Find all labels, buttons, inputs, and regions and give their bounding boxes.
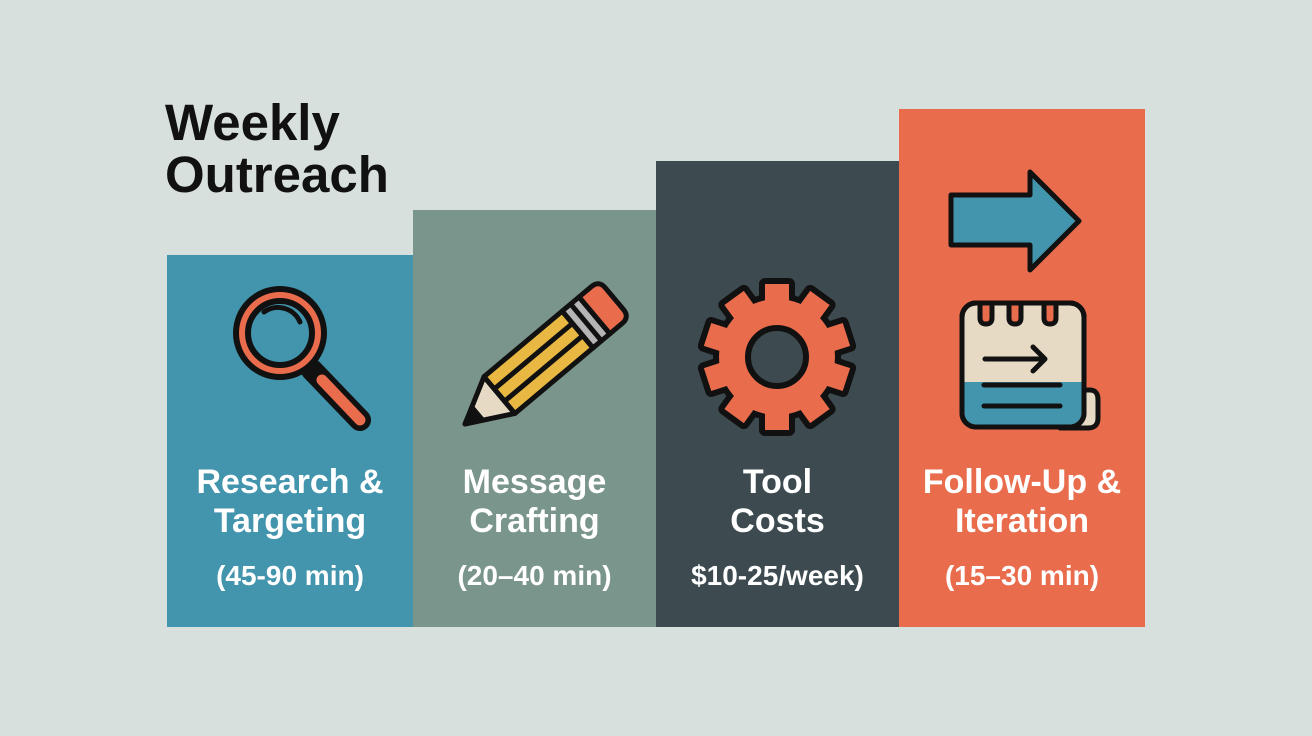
sub: tools: $10-25/week) (691, 560, 864, 591)
label: tools: Costs (730, 502, 825, 540)
label: research: Research & (196, 463, 384, 501)
label: message: Message (463, 463, 606, 501)
title: Outreach (165, 146, 389, 203)
bar: tools (656, 161, 899, 627)
icon: pencil (450, 280, 630, 442)
title: Weekly (165, 94, 340, 151)
label: tools (730, 463, 825, 540)
label: follow-up: Follow-Up & (923, 463, 1121, 501)
label: message (463, 463, 606, 540)
sub: follow-up: (15–30 min) (945, 560, 1099, 591)
icon: gear (704, 284, 850, 430)
label: message: Crafting (469, 502, 600, 540)
icon: magnifier (236, 289, 360, 420)
bar: follow-up (899, 109, 1145, 627)
icon: calendar (962, 303, 1098, 428)
bar: message (413, 210, 656, 627)
title (165, 94, 389, 203)
icon: arrow (951, 172, 1079, 270)
label: tools: Tool (743, 463, 812, 501)
sub: research: (45-90 min) (216, 560, 364, 591)
label: research (196, 463, 384, 540)
sub: message: (20–40 min) (457, 560, 612, 591)
label: research: Targeting (214, 502, 366, 540)
label: follow-up (923, 463, 1121, 540)
bar: research (167, 255, 413, 627)
label: follow-up: Iteration (955, 502, 1089, 540)
